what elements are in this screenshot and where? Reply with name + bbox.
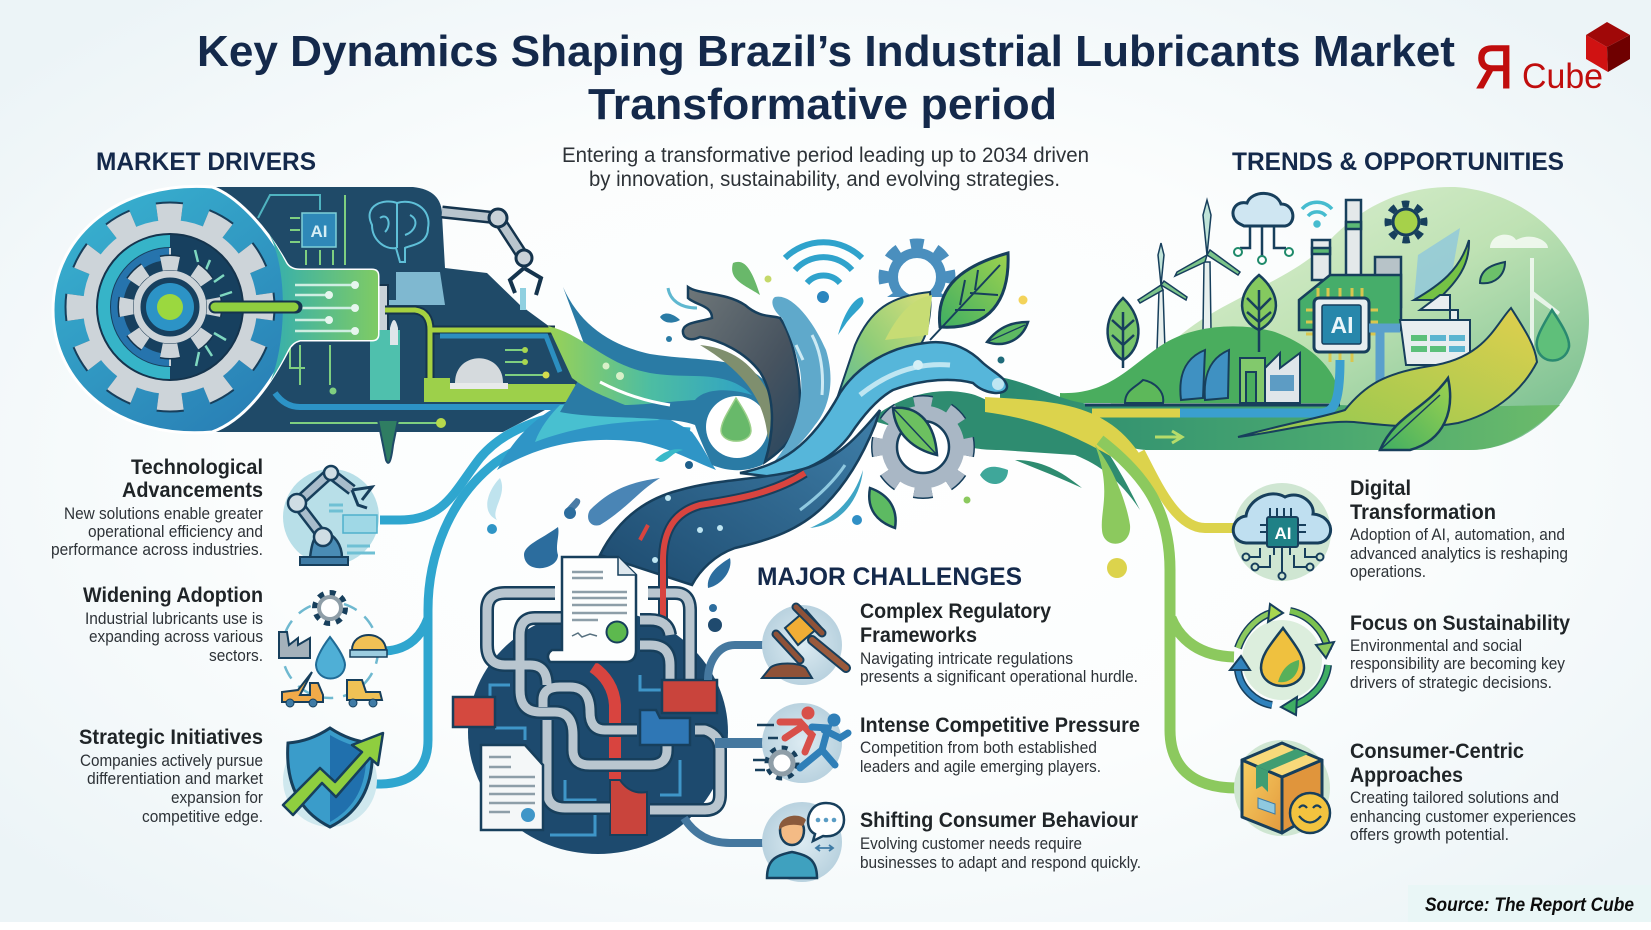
- text: technological advancements: [51, 456, 263, 559]
- green hill: [1060, 326, 1340, 403]
- big leaf: [930, 253, 1008, 340]
- icon: robot arm: [283, 466, 379, 565]
- text: digital transformation: Digital: [1350, 477, 1411, 500]
- item: intense competitive pressure: [753, 703, 1140, 783]
- text: strategic initiatives: expansion for: [171, 789, 263, 807]
- dark sphere: [468, 610, 728, 854]
- text: intense competitive pressure: Competition from both established: [860, 739, 1097, 757]
- item: shifting consumer behaviour: [762, 802, 1141, 882]
- AI chip: [258, 180, 345, 265]
- second document: [481, 745, 543, 830]
- subtitle: by innovation, sustainability, and evolving strategies.: [589, 168, 1060, 191]
- text: consumer-centric approaches: offers growth potential.: [1350, 826, 1509, 844]
- text: digital transformation: [1350, 477, 1568, 581]
- text: strategic initiatives: differentiation and market: [87, 770, 263, 788]
- text: widening adoption: Widening Adoption: [83, 584, 263, 607]
- machinery and pipes: [275, 272, 603, 463]
- gear disc and arm: [53, 186, 378, 433]
- text: strategic initiatives: Companies actively pursue: [80, 752, 263, 770]
- item: complex regulatory frameworks: [762, 600, 1138, 686]
- droplets: [487, 262, 1082, 632]
- text: technological advancements: performance across industries.: [51, 541, 263, 559]
- left column items: [51, 456, 387, 827]
- item: focus on sustainability: [1230, 604, 1570, 715]
- grey gear with leaf: [881, 405, 965, 489]
- text: complex regulatory frameworks: Complex Regulatory: [860, 600, 1051, 623]
- chimneys and factory: [1299, 200, 1401, 330]
- text: widening adoption: Industrial lubricants use is: [85, 610, 263, 628]
- green drip: [1095, 445, 1130, 544]
- wifi icon: [785, 242, 862, 303]
- AI chip: AI: [310, 222, 328, 241]
- text: intense competitive pressure: leaders and agile emerging players.: [860, 758, 1101, 776]
- AI chip: [1306, 288, 1400, 385]
- olive strip behind oil: [700, 345, 771, 440]
- illustration: market drivers panel: [53, 180, 603, 463]
- icon: AI cloud: AI: [1274, 524, 1292, 543]
- text: widening adoption: sectors.: [209, 647, 263, 665]
- leaf band top cover: [885, 295, 932, 340]
- dark circuit panel: [212, 187, 603, 432]
- text: technological advancements: operational efficiency and: [88, 523, 263, 541]
- text: shifting consumer behaviour: businesses to adapt and respond quickly.: [860, 854, 1141, 872]
- cloud network: [1233, 193, 1293, 264]
- subtitle: [562, 144, 1089, 191]
- right column items: [1230, 477, 1576, 844]
- text: focus on sustainability: [1350, 612, 1570, 692]
- text: shifting consumer behaviour: Evolving customer needs require: [860, 835, 1082, 853]
- falling leaf: [869, 488, 896, 528]
- small leaf: [987, 322, 1028, 344]
- blue gear: [886, 246, 948, 308]
- logo: RCube: Я: [1475, 34, 1513, 101]
- connectors: challenges: [684, 645, 764, 843]
- text: complex regulatory frameworks: presents a significant operational hurdle.: [860, 668, 1138, 686]
- wave highlight: [740, 342, 1007, 477]
- connector flows: left: [375, 410, 690, 784]
- text: consumer-centric approaches: enhancing customer experiences: [1350, 808, 1576, 826]
- text: complex regulatory frameworks: Frameworks: [860, 624, 977, 647]
- AI chip: AI: [1330, 312, 1354, 338]
- icon: gavel: [762, 605, 846, 685]
- blue wave: [772, 297, 830, 464]
- illustration: trends and opportunities panel: [1000, 187, 1589, 450]
- pipe stripe: [1085, 360, 1340, 443]
- text: technological advancements: Advancements: [122, 479, 263, 502]
- logo: RCube: [1475, 22, 1630, 101]
- cloud and turbine ghost: [1490, 235, 1560, 370]
- text: widening adoption: expanding across various: [89, 628, 263, 646]
- text: focus on sustainability: drivers of strategic decisions.: [1350, 674, 1552, 692]
- icon: shield with arrow: [283, 728, 383, 827]
- oil splash: [683, 287, 800, 462]
- title: Key Dynamics Shaping Brazil’s Industrial Lubricants Market: [197, 27, 1455, 76]
- yellow dot: [1107, 558, 1127, 578]
- text: digital transformation: operations.: [1350, 563, 1426, 581]
- text: technological advancements: New solutions enable greater: [64, 505, 263, 523]
- text: consumer-centric approaches: Creating tailored solutions and: [1350, 789, 1559, 807]
- small gear: [1388, 204, 1424, 240]
- center column: major challenges: [753, 563, 1141, 882]
- item: technological advancements: [51, 456, 379, 565]
- red vertical stripe through pipes: [660, 565, 666, 600]
- green band: [1000, 377, 1560, 450]
- dark swoosh band: [560, 287, 778, 470]
- text: technological advancements: Technological: [131, 456, 263, 479]
- source credit: Source: The Report Cube: [1425, 895, 1634, 916]
- small leaf: [1480, 262, 1505, 283]
- title: [197, 27, 1455, 129]
- teal band beneath wave: [870, 391, 1140, 510]
- solar panels and buildings: [1125, 350, 1300, 403]
- swoosh leaf: [1380, 378, 1450, 450]
- document with green seal: [548, 557, 636, 662]
- text: shifting consumer behaviour: Shifting Consumer Behaviour: [860, 809, 1138, 832]
- text: strategic initiatives: Strategic Initiatives: [79, 726, 263, 749]
- green leaf band: [830, 292, 931, 420]
- text: digital transformation: Transformation: [1350, 501, 1496, 524]
- text: shifting consumer behaviour: [860, 809, 1141, 872]
- yellow-green swoosh: [1238, 308, 1537, 437]
- wind turbines: [1138, 200, 1240, 350]
- complex pipes illustration: [453, 557, 728, 854]
- icon: recycle drop: [1230, 604, 1334, 715]
- red blocks: [453, 680, 717, 727]
- icon: box with smile: [1234, 740, 1330, 836]
- glass leaf: [1414, 228, 1469, 300]
- text: widening adoption: [83, 584, 263, 665]
- heading: market drivers: MARKET DRIVERS: [96, 148, 316, 176]
- text: intense competitive pressure: Intense Competitive Pressure: [860, 714, 1140, 737]
- text: consumer-centric approaches: Approaches: [1350, 764, 1463, 787]
- water drop: [1537, 310, 1569, 360]
- green connectors: [1100, 440, 1237, 788]
- logo: RCube: Cube: [1522, 57, 1603, 96]
- heading: trends and opportunities: TRENDS & OPPORTUNITIES: [1232, 148, 1564, 176]
- text: digital transformation: advanced analytics is reshaping: [1350, 545, 1568, 563]
- yellow swoosh and connector: [985, 397, 1234, 528]
- text: focus on sustainability: Focus on Sustainability: [1350, 612, 1570, 635]
- item: consumer-centric approaches: [1234, 740, 1576, 844]
- trees: [1108, 275, 1276, 368]
- green drop in white circle: [706, 396, 768, 458]
- icon: sectors cycle: [279, 594, 387, 707]
- wifi icon: [1302, 202, 1332, 226]
- blue block: [640, 710, 690, 745]
- pale green backdrop: [1100, 187, 1589, 450]
- icon: AI cloud: [1233, 483, 1331, 581]
- text: complex regulatory frameworks: [860, 600, 1138, 686]
- pipe network: [487, 593, 720, 810]
- subtitle: Entering a transformative period leading up to 2034 driven: [562, 144, 1089, 167]
- robot arm: [442, 209, 541, 310]
- item: strategic initiatives: [79, 726, 383, 827]
- circuit traces: [490, 675, 680, 835]
- text: consumer-centric approaches: [1350, 740, 1576, 844]
- red stream: [593, 667, 615, 785]
- item: digital transformation: [1233, 477, 1568, 581]
- icon: person with speech bubble: [762, 802, 844, 882]
- red block bottom: [610, 780, 647, 835]
- title: Transformative period: [588, 80, 1057, 129]
- text: intense competitive pressure: [860, 714, 1140, 776]
- brain: [370, 201, 429, 262]
- text: focus on sustainability: responsibility are becoming key: [1350, 655, 1566, 673]
- text: digital transformation: Adoption of AI, automation, and: [1350, 526, 1565, 544]
- table building: [1400, 295, 1470, 365]
- central flow illustration: [375, 242, 1237, 788]
- icon: runners and gear: [753, 703, 848, 783]
- source credit: [1408, 885, 1651, 922]
- text: focus on sustainability: Environmental and social: [1350, 637, 1522, 655]
- text: consumer-centric approaches: Consumer-Centric: [1350, 740, 1524, 763]
- blue lower swoosh: [497, 395, 716, 470]
- green body: [548, 326, 752, 405]
- text: strategic initiatives: [79, 726, 263, 826]
- text: strategic initiatives: competitive edge.: [142, 808, 263, 826]
- dark flow with red stripe: [600, 410, 880, 625]
- text: complex regulatory frameworks: Navigating intricate regulations: [860, 650, 1073, 668]
- item: widening adoption: [83, 584, 387, 707]
- heading: major challenges: MAJOR CHALLENGES: [757, 563, 1022, 591]
